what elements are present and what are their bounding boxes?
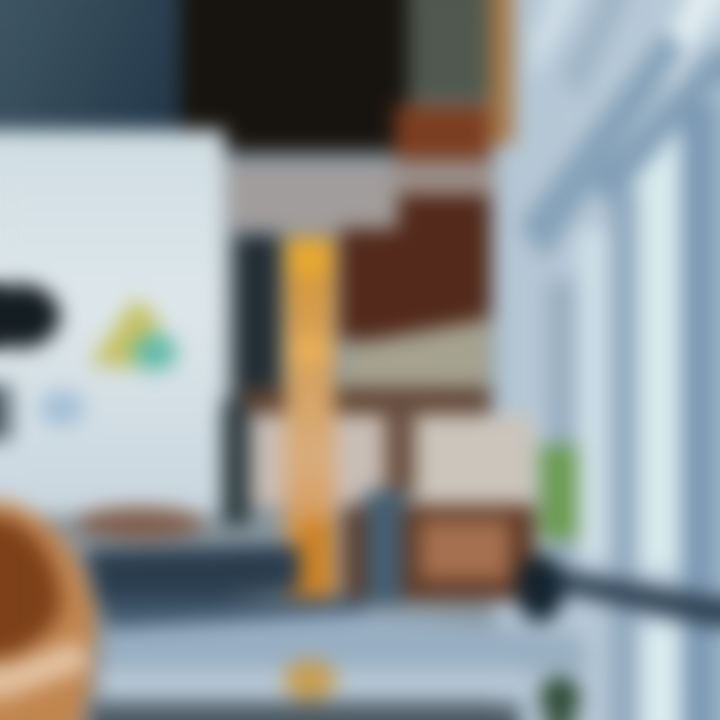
grey beam [228, 165, 398, 229]
beige shelf [345, 318, 490, 395]
window bright panes [530, 0, 720, 720]
wall left dark mark [0, 385, 10, 440]
white panels [250, 405, 535, 506]
table dark [75, 507, 365, 650]
chart teal [133, 333, 177, 371]
brown sideboard [345, 505, 535, 600]
window frames [520, 0, 720, 720]
chart yellow green [90, 298, 160, 368]
green plant bottom [540, 676, 580, 720]
dark vase [516, 554, 564, 622]
wall blue mark [40, 390, 84, 426]
ceiling left [0, 0, 220, 140]
dark post lower [222, 400, 250, 525]
golden column [285, 237, 335, 612]
light beam right [395, 165, 495, 195]
ceiling dark center [180, 0, 410, 152]
dark object on wall [0, 284, 60, 348]
window sill [550, 568, 720, 628]
chair [0, 500, 95, 720]
dark column [235, 235, 280, 410]
brown under shelf [245, 388, 490, 414]
window wall [495, 0, 720, 720]
orange strip [490, 0, 514, 145]
gold reflection [284, 660, 336, 700]
table light [90, 612, 590, 720]
upper grey panel [408, 0, 493, 102]
brown wood panel [340, 105, 490, 340]
green plant [540, 445, 578, 540]
left white wall [0, 130, 225, 515]
blue object [365, 490, 403, 605]
